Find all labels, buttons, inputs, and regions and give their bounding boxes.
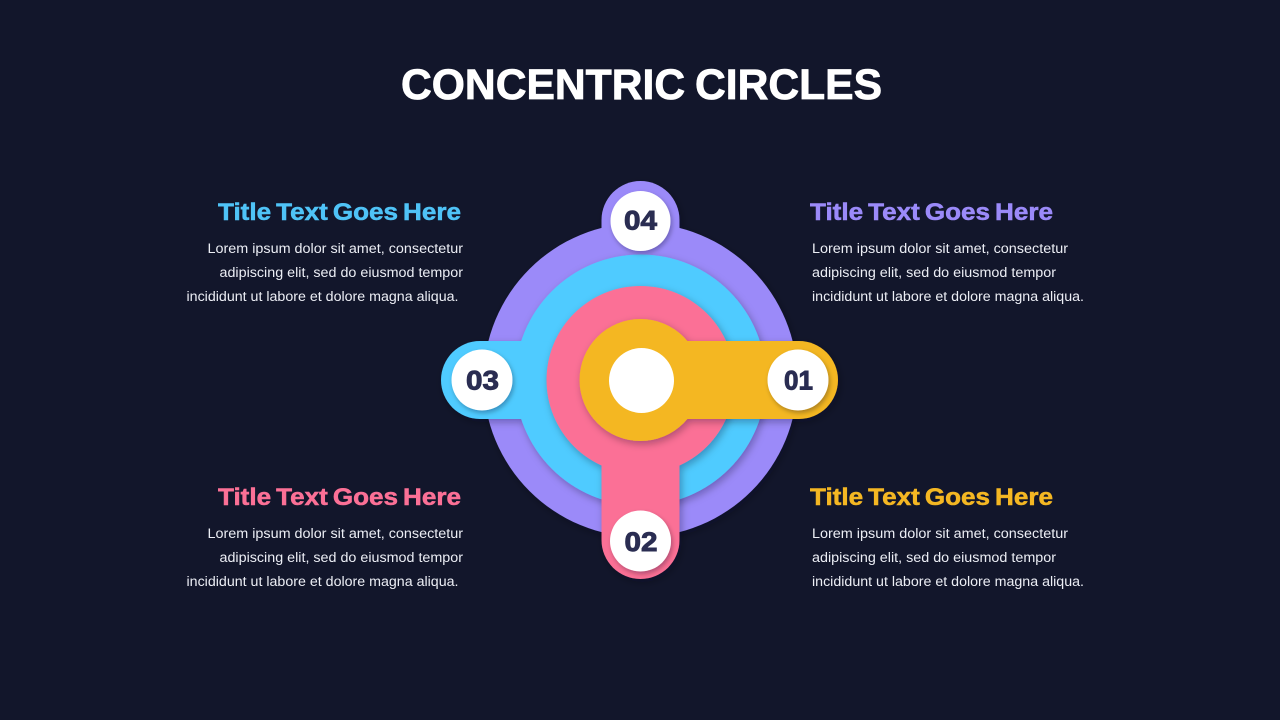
text block: bottom right: adipiscing elit, sed do eiusmod tempor [812,550,1057,565]
text block: top right: incididunt ut labore et dolore magna aliqua. [812,289,1084,304]
badge 03: 03 [466,366,499,396]
text block: top right: Lorem ipsum dolor sit amet, consectetur [812,241,1069,256]
text block: top left: adipiscing elit, sed do eiusmod tempor [220,265,464,280]
text block: bottom left: Title Text Goes Here [218,484,461,511]
ring: blue with tab 03 [441,254,766,506]
concentric circles diagram [441,181,838,579]
badge 04 [610,191,670,251]
badge 02: 02 [624,527,658,557]
badge 04: 04 [624,206,657,236]
text block: top left: incididunt ut labore et dolore magna aliqua. [186,289,458,304]
ring: yellow with tab 01 [580,319,838,441]
text block: bottom right: incididunt ut labore et dolore magna aliqua. [812,574,1084,589]
badge 01: 01 [784,366,813,396]
text block: top right [810,199,1084,304]
text block: top left [186,199,464,304]
text block: bottom left: adipiscing elit, sed do eiusmod tempor [220,550,464,565]
text block: top right: adipiscing elit, sed do eiusmod tempor [812,265,1057,280]
text block: bottom left: incididunt ut labore et dolore magna aliqua. [186,574,458,589]
ring: pink with tab 02 [546,286,734,579]
text block: top left: Lorem ipsum dolor sit amet, consectetur [208,241,464,256]
title: CONCENTRIC CIRCLES [401,61,882,109]
text block: top left: Title Text Goes Here [218,199,461,226]
badge 02 [610,510,671,572]
badge 01 [768,350,828,410]
text block: bottom right: Title Text Goes Here [810,484,1053,511]
text block: top right: Title Text Goes Here [810,199,1053,226]
text block: bottom right: Lorem ipsum dolor sit amet, consectetur [812,526,1069,541]
text block: bottom left [186,484,464,589]
text block: bottom left: Lorem ipsum dolor sit amet, consectetur [208,526,464,541]
center white circle [609,348,674,413]
ring: purple with tab 04 [484,181,798,537]
text block: bottom right [810,484,1084,589]
badge 03 [452,350,512,410]
